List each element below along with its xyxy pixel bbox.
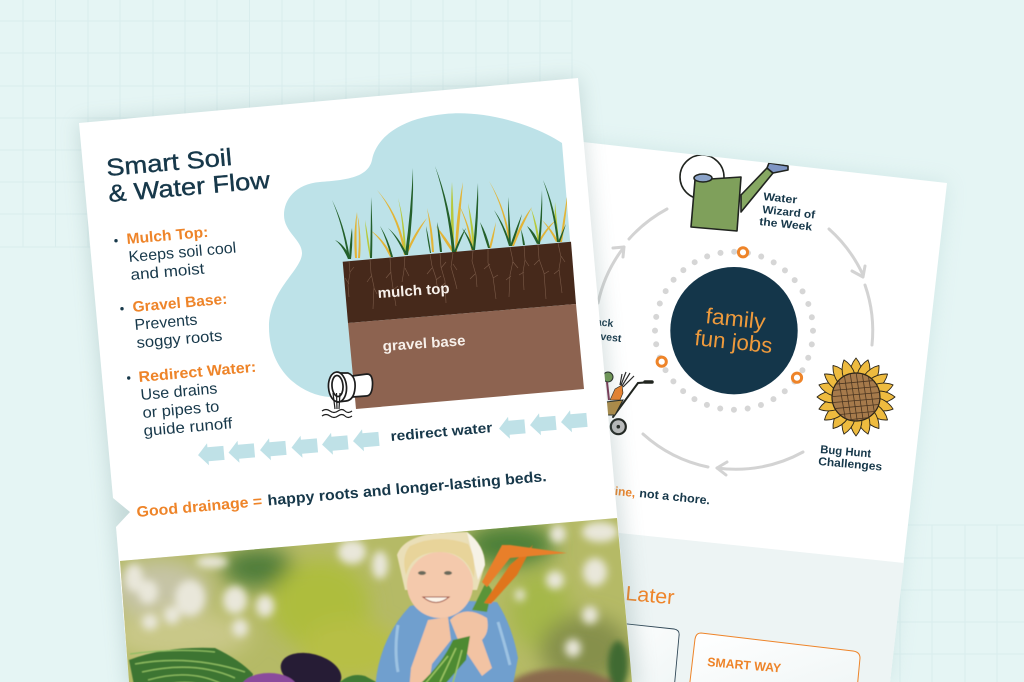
- text: bug hunt label: Challenges: [818, 456, 883, 474]
- callout: good drainage: happy roots and longer-lasting beds.: [267, 468, 547, 509]
- text: harvest label: [579, 315, 622, 357]
- grass: [332, 166, 567, 259]
- title: & Water Flow: [107, 167, 272, 208]
- text: routine note: [591, 481, 711, 507]
- bullet list: Use drains: [140, 380, 218, 404]
- bullet list: Gravel Base:: [132, 291, 228, 316]
- soil diagram: [343, 242, 584, 409]
- center circle: family fun jobs: [670, 267, 798, 394]
- bullet list: soggy roots: [136, 328, 223, 352]
- plant roots: [345, 243, 565, 309]
- text: harvest label: Bins: [579, 343, 603, 357]
- center circle: family fun jobs: fun jobs: [693, 325, 774, 358]
- text: routine note: not a chore.: [639, 486, 711, 507]
- box: comparison card: [600, 621, 679, 682]
- child figure: [375, 532, 567, 682]
- ring markers: [657, 248, 802, 382]
- vegetables: [129, 647, 380, 682]
- text: water wizard label: the Week: [759, 216, 814, 234]
- bullet list: or pipes to: [142, 398, 220, 422]
- icon: drain pipe: [322, 371, 373, 418]
- bullet list: Mulch Top:: [126, 224, 209, 248]
- soil diagram: gravel base: [382, 333, 466, 355]
- text: water wizard label: [759, 191, 816, 234]
- bullet list: and moist: [130, 261, 206, 284]
- arrows: water flow left: [197, 409, 588, 466]
- panel: family fun jobs card: [579, 142, 947, 682]
- icon: wheelbarrow: [603, 372, 652, 434]
- text: water wizard label: Water: [763, 191, 799, 207]
- text: harvest label: Harvest: [582, 329, 622, 345]
- callout: good drainage: [136, 468, 547, 521]
- text: harvest label: Pack: [588, 315, 614, 330]
- bullet list: [114, 224, 257, 440]
- bullet list: Keeps soil cool: [128, 240, 237, 266]
- bullet list: guide runoff: [143, 415, 234, 440]
- box: smart way card: SMART WAY: [707, 655, 782, 675]
- text: bug hunt label: Bug Hunt: [820, 444, 872, 460]
- photo: child holding carrots: [110, 510, 640, 682]
- box: smart way card: [689, 633, 860, 682]
- bullet list: Redirect Water:: [138, 359, 257, 386]
- title: Smart Soil: [105, 144, 233, 182]
- icon: sunflower: [817, 358, 895, 436]
- icon: watering can: [680, 155, 788, 231]
- heading: later: Later: [625, 582, 676, 609]
- title: [105, 144, 272, 208]
- water blob background: [269, 113, 575, 397]
- panel: smart soil card: [79, 78, 640, 682]
- bullet list: Prevents: [134, 312, 198, 334]
- text: water wizard label: Wizard of: [762, 204, 816, 222]
- text: bug hunt label: [818, 444, 883, 474]
- cycle arrows: [598, 209, 873, 475]
- center circle: family fun jobs: family: [704, 303, 767, 334]
- text: routine note: routine,: [591, 481, 636, 500]
- dotted ring: [655, 252, 813, 410]
- label: redirect water: redirect water: [390, 419, 493, 444]
- callout: good drainage: Good drainage =: [136, 493, 263, 521]
- soil diagram: mulch top: [377, 281, 450, 302]
